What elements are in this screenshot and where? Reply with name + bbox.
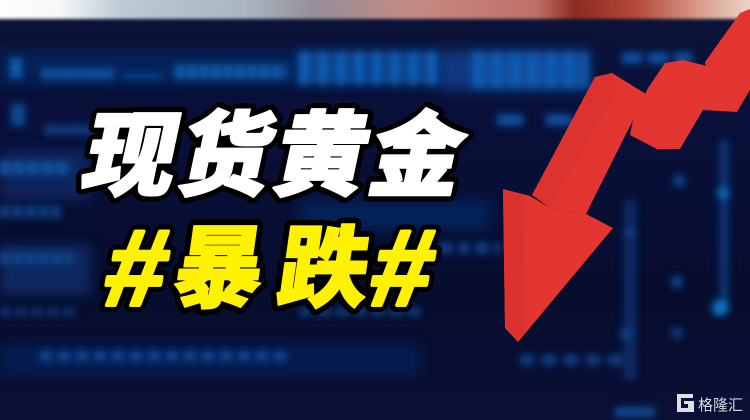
hash right: #: [363, 208, 444, 329]
tag: #暴跌#: [97, 208, 444, 329]
watermark text: 格隆汇: [698, 397, 743, 414]
arrow body lower segment: [532, 73, 667, 214]
hash left: #: [97, 208, 178, 329]
red falling arrow: [503, 9, 750, 342]
top bright strip: [0, 0, 750, 19]
arrow shaded left face: [532, 73, 617, 208]
tag characters: 暴跌: [167, 219, 376, 320]
watermark logo: [677, 394, 743, 414]
arrow body upper segment: [703, 9, 750, 112]
arrow head shaded face: [503, 189, 525, 342]
tag characters: 暴跌: [167, 219, 376, 320]
hash right: #: [363, 208, 444, 329]
arrow body middle segment: [630, 60, 723, 149]
icon: G mark: [677, 394, 694, 412]
title: 现货黄金: 现货黄金: [75, 105, 475, 208]
title: 现货黄金: 现货黄金: [75, 105, 475, 208]
hash left: #: [97, 208, 178, 329]
arrow head: [503, 189, 613, 342]
